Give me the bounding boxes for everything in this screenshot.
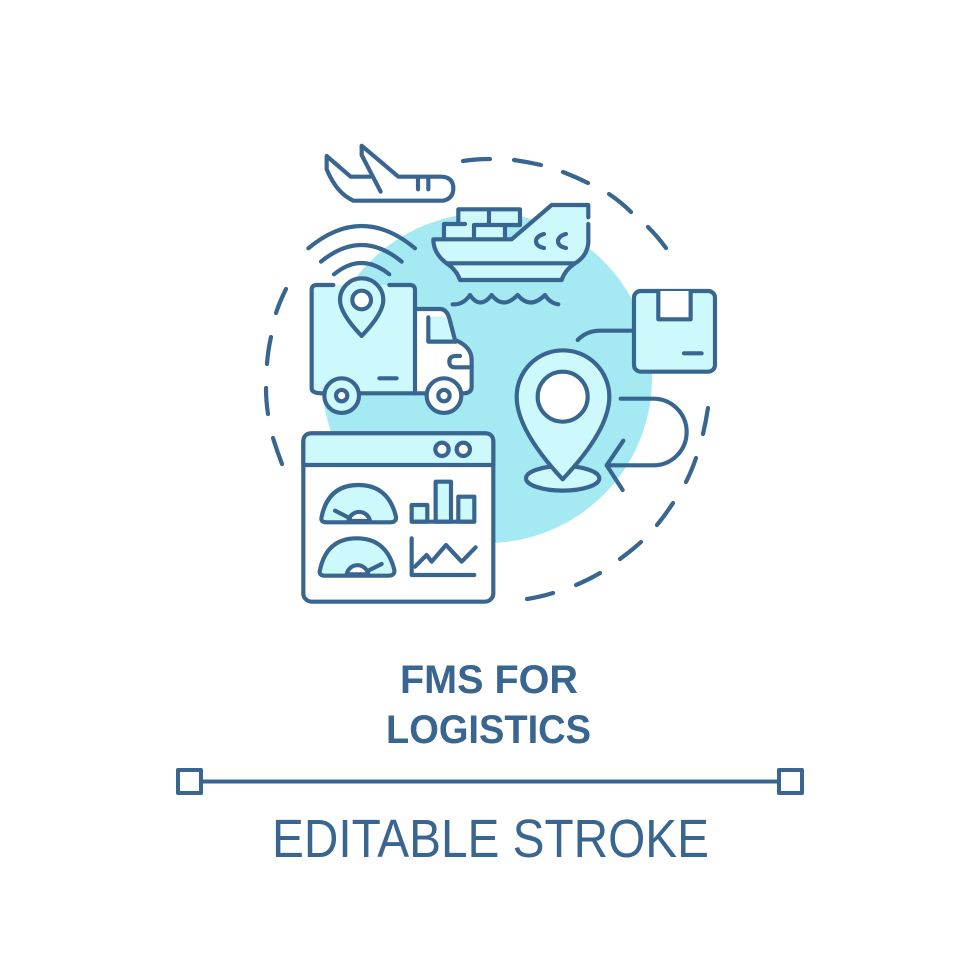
- teal background circle: [322, 213, 652, 543]
- gauge bottom: [320, 538, 394, 576]
- title: [386, 658, 591, 752]
- line chart: [412, 538, 476, 575]
- caption: EDITABLE STROKE: [272, 809, 709, 869]
- panel: dashboard window: [303, 433, 493, 602]
- icon: route arrow: [607, 399, 687, 490]
- dashed orbit ring: [266, 159, 708, 599]
- icon: water waves: [453, 295, 558, 304]
- icon: wifi signal: [308, 226, 415, 274]
- icon: cargo ship: [433, 205, 588, 280]
- window header bar: [303, 433, 493, 465]
- window control dots: [435, 443, 470, 456]
- icon: parcel box with connector: [578, 291, 715, 372]
- icon: location pin: [517, 350, 609, 491]
- icon: delivery truck: [312, 278, 472, 413]
- title: FMS FOR: [400, 658, 578, 702]
- icon: airplane: [327, 146, 453, 201]
- editable stroke line with handles: [178, 770, 802, 793]
- gauge top: [321, 485, 396, 522]
- bar chart: [412, 482, 474, 522]
- title: LOGISTICS: [386, 708, 591, 752]
